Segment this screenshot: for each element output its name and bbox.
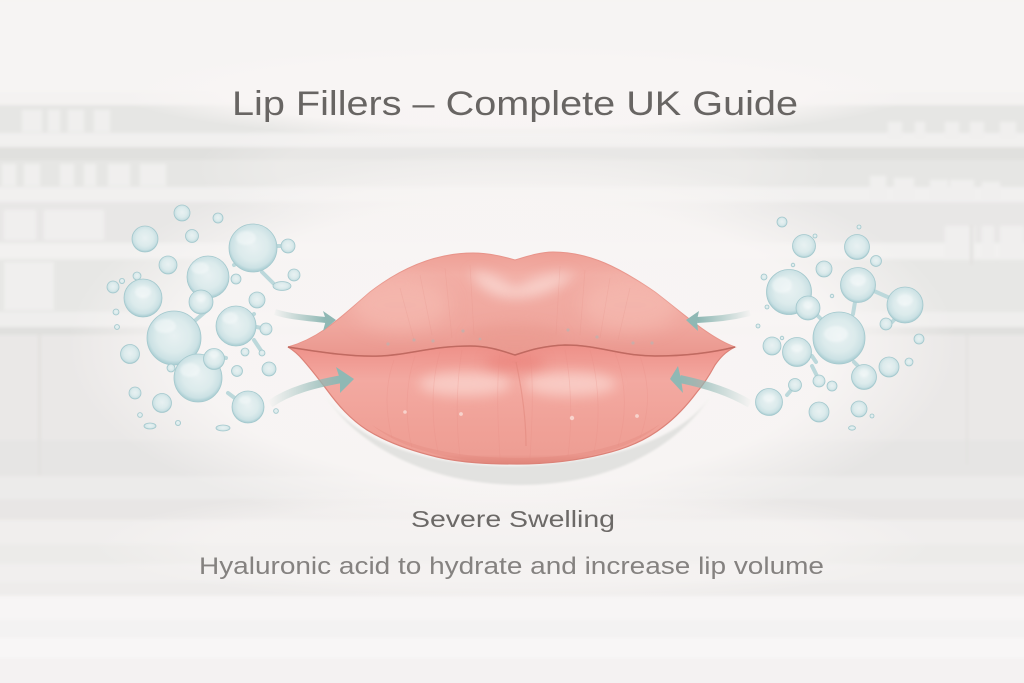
title: Lip Fillers – Complete UK Guide: [232, 85, 798, 123]
arrow: lower right: [670, 366, 750, 404]
shelf items: [2, 110, 1024, 310]
lower lip: [288, 345, 735, 464]
description: Hyaluronic acid to hydrate and increase lip volume: [199, 553, 824, 580]
arrow: upper left: [275, 311, 336, 331]
illustration: lips: [288, 252, 735, 464]
molecules: right cluster: [756, 217, 924, 430]
upper lip: [288, 252, 735, 356]
mouth line: [288, 345, 735, 356]
lips shadow: [322, 388, 716, 485]
arrow: upper right: [686, 311, 750, 331]
subheading: Severe Swelling: [411, 506, 615, 532]
molecules: left cluster: [107, 205, 300, 431]
arrow: lower left: [270, 367, 354, 404]
